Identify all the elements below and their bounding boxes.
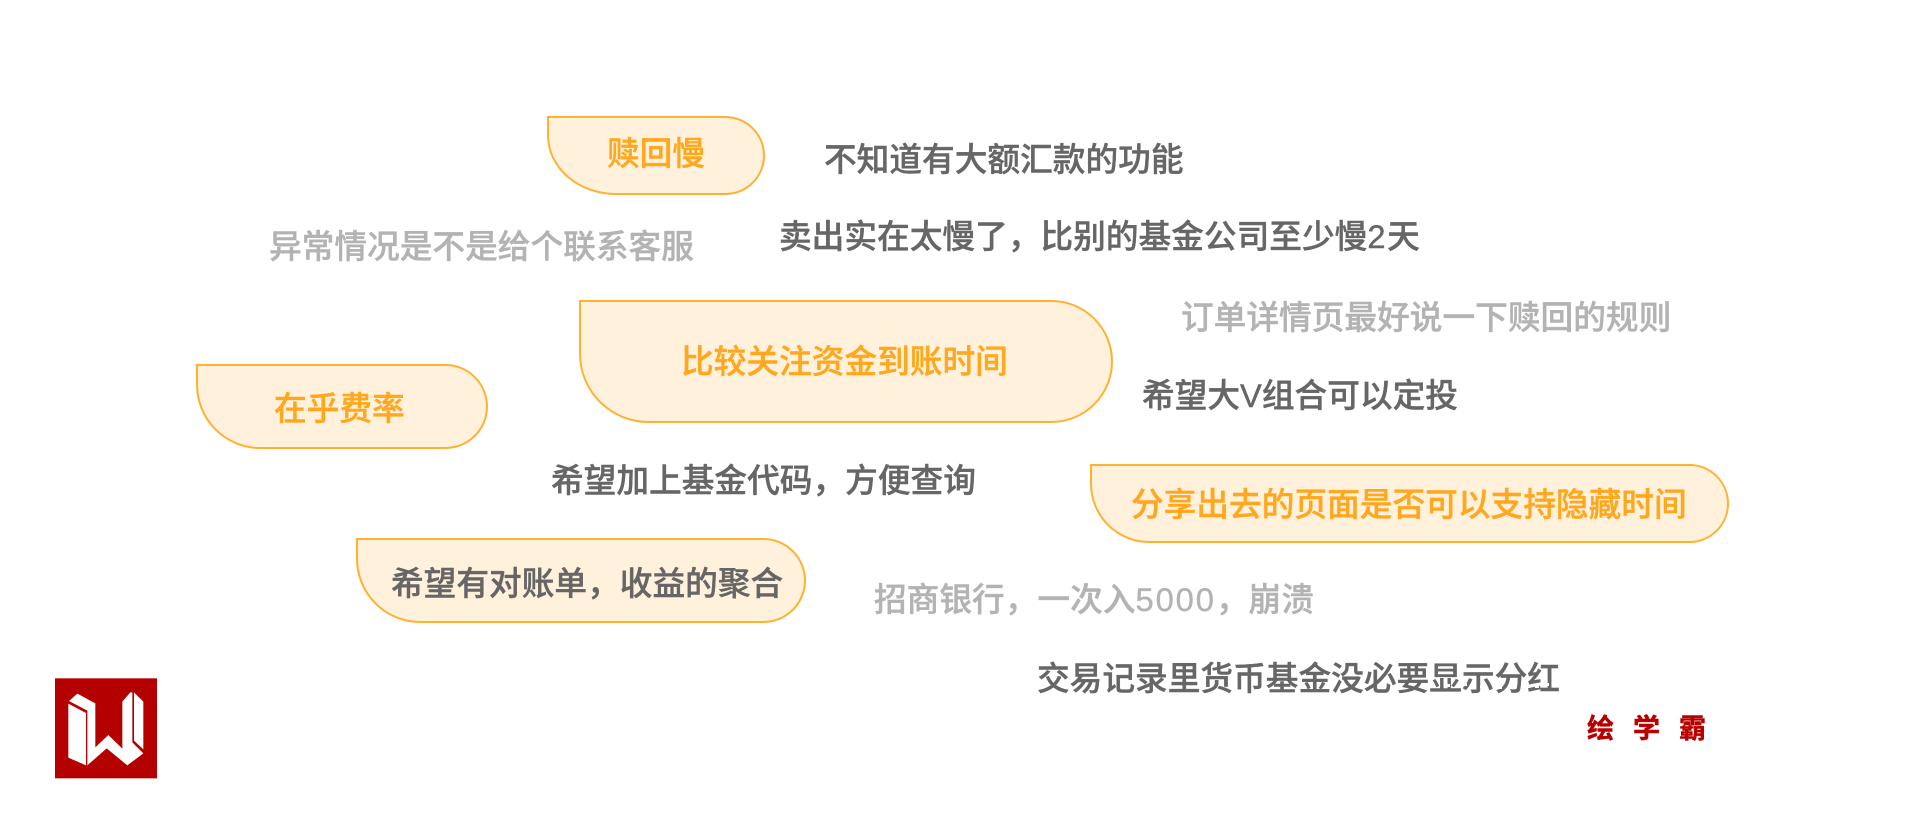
- text: V portfolio investment: 希望大V组合可以定投: [1142, 377, 1458, 414]
- text: selling too slow: 卖出实在太慢了，比别的基金公司至少慢2天: [779, 218, 1420, 255]
- pill text: fee rate: 在乎费率: [274, 390, 405, 427]
- pill: fund arrival time: [579, 300, 1113, 423]
- text: fund code: 希望加上基金代码，方便查询: [551, 462, 976, 499]
- pill: fee rate: [196, 364, 488, 449]
- pill: hide time on share: [1090, 464, 1729, 543]
- text: bank limit: 招商银行，一次入5000，崩溃: [874, 581, 1314, 618]
- pill text: hide time on share: 分享出去的页面是否可以支持隐藏时间: [1131, 486, 1687, 523]
- pill text: fund arrival time: 比较关注资金到账时间: [681, 343, 1008, 380]
- logo: red W square: [55, 678, 157, 778]
- text: order detail rules: 订单详情页最好说一下赎回的规则: [1181, 299, 1671, 336]
- pill text: statement aggregation: 希望有对账单，收益的聚合: [391, 565, 783, 602]
- pill: statement aggregation: [356, 538, 806, 623]
- text: dividend records: 交易记录里货币基金没必要显示分红: [1037, 660, 1560, 697]
- text: contact customer service: 异常情况是不是给个联系客服: [269, 228, 694, 265]
- text: large transfer feature: 不知道有大额汇款的功能: [824, 141, 1184, 178]
- pill text: redemption slow: 赎回慢: [607, 135, 705, 172]
- pill: redemption slow: [547, 116, 765, 195]
- brand name: 绘学霸: [1587, 714, 1725, 744]
